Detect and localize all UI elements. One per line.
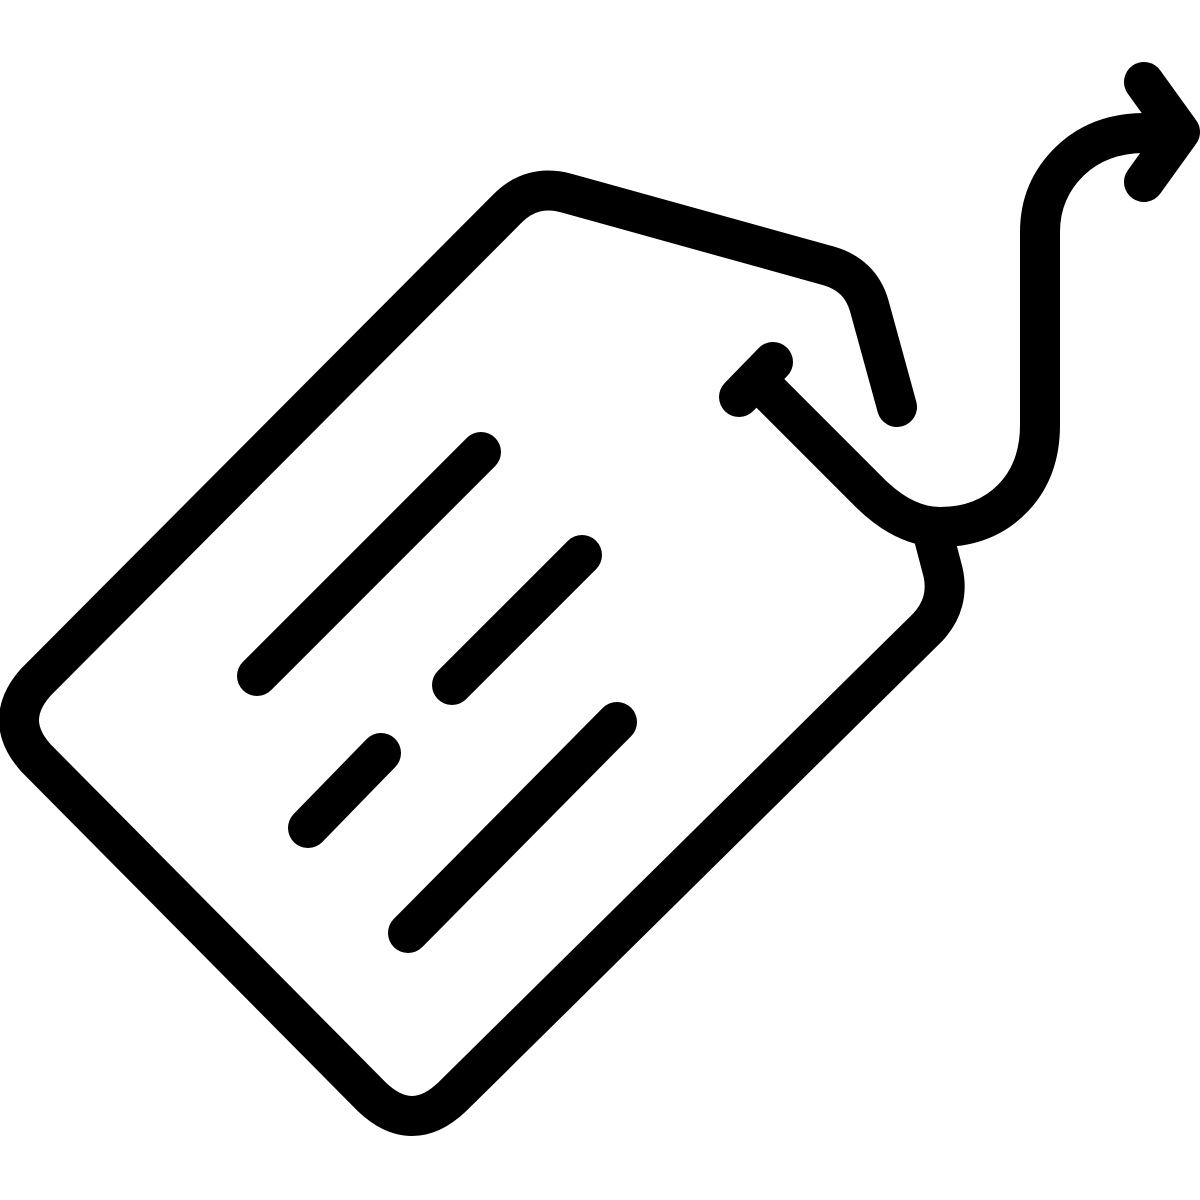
arrowhead (1144, 82, 1180, 182)
tag outline (19, 191, 945, 1116)
string with crossbar (739, 133, 1145, 527)
text lines on tag (257, 452, 617, 933)
